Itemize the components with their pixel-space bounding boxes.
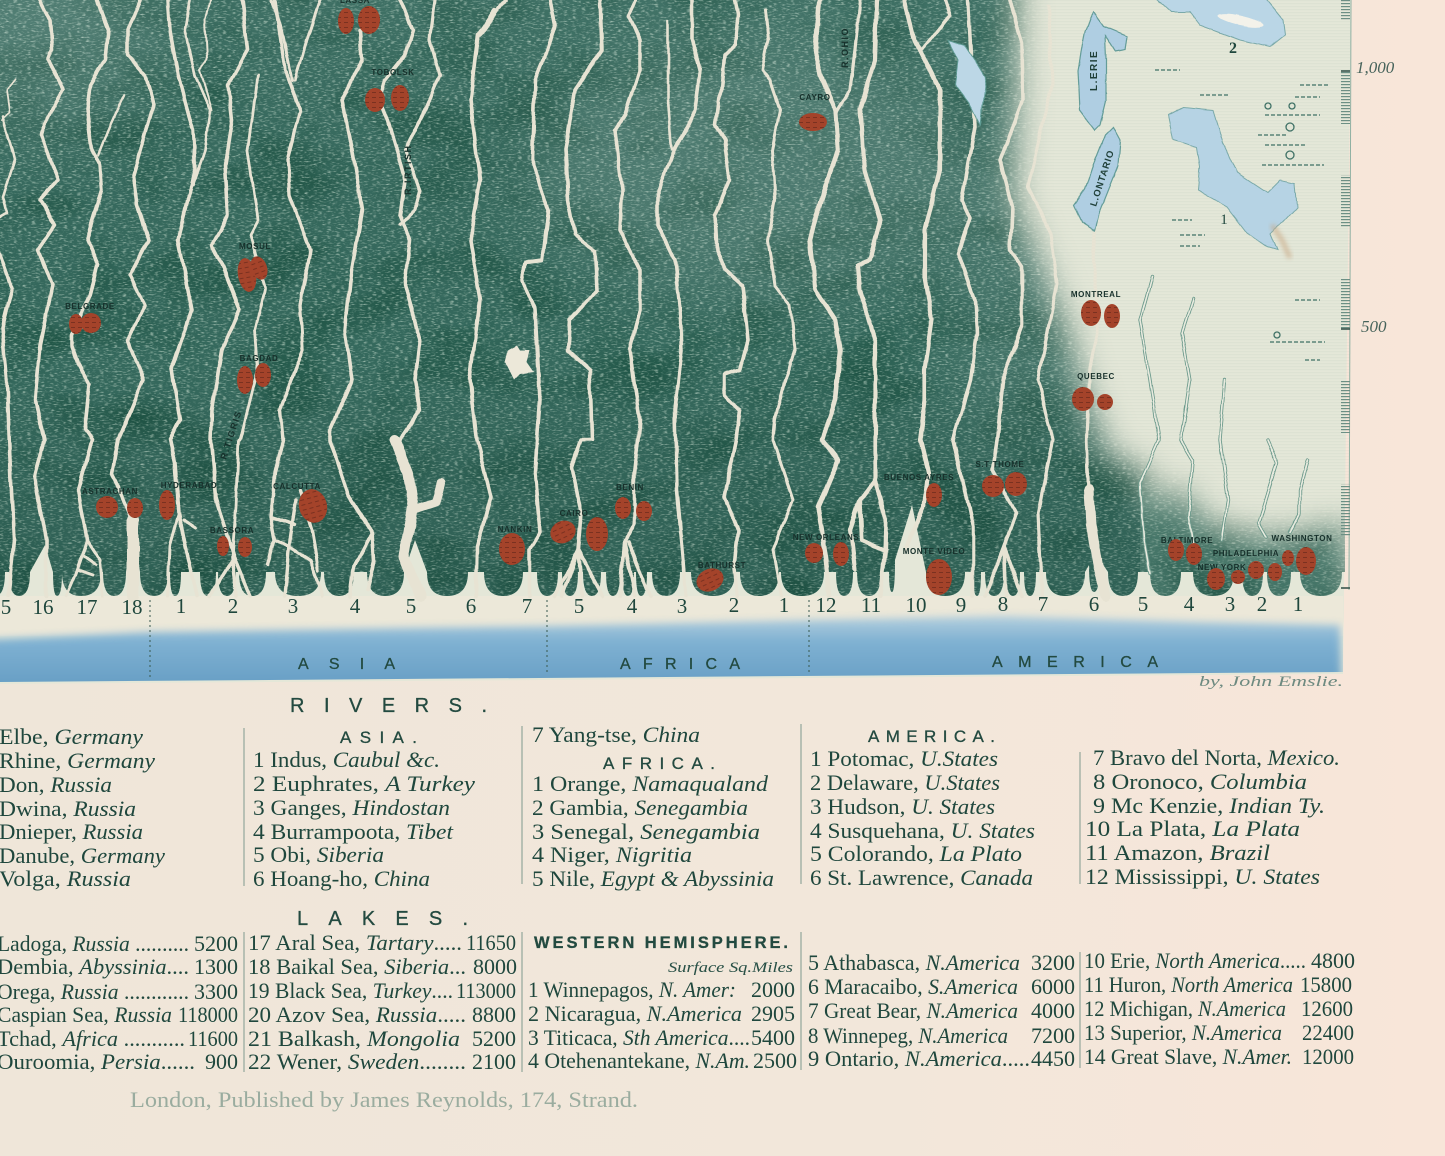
- river numbers: 2: [1257, 592, 1267, 616]
- lakes: column four: 6 Maracaibo, S.America: [808, 974, 1018, 999]
- city: Cairo: [547, 509, 608, 551]
- lakes: column one: Caspian Sea, Russia: [0, 1002, 172, 1027]
- rivers: asia column: 1 Indus, Caubul &c.: [253, 747, 440, 772]
- river numbers: 1: [779, 593, 789, 617]
- rivers: america column two: 7 Bravo del Norta, Mexico.: [1093, 745, 1340, 770]
- city: Bassora: [210, 526, 254, 557]
- rivers: [0, 0, 1106, 596]
- lakes: column three western hemisphere: 1 Winnepagos, N. Amer:: [528, 977, 736, 1002]
- lakes: column one: Ouroomia, Persia......: [0, 1049, 195, 1074]
- city: St Thome: [976, 460, 1027, 497]
- label R. Tigris: R.TIGRIS: [218, 409, 244, 461]
- label R. Irtish: R.IRTISH: [403, 144, 413, 195]
- lakes: column one: 1300: [194, 954, 238, 979]
- rivers: africa column: 1 Orange, Namaqualand: [532, 771, 769, 796]
- city: Philadelphia: PHILADELPHIA: [1213, 549, 1279, 558]
- river numbers: 3: [677, 594, 687, 618]
- rivers: america column two: 12 Mississippi, U. States: [1085, 864, 1320, 889]
- city: Buenos Ayres: BUENOS AYRES: [884, 473, 954, 482]
- river numbers: 16: [32, 595, 54, 619]
- lakes: column two: 8800: [472, 1002, 516, 1027]
- lake 1: [1168, 107, 1297, 250]
- city: Lassa: [338, 0, 380, 34]
- rivers: asia column: 3 Ganges, Hindostan: [253, 795, 450, 820]
- city: Mosul: [235, 242, 271, 293]
- scale label 1,000: 1,000: [1356, 58, 1395, 77]
- city: Philadelphia: [1213, 549, 1282, 581]
- lakes: column three western hemisphere: 5400: [751, 1025, 795, 1050]
- lakes: column three western hemisphere: [522, 932, 797, 1073]
- city: Calcutta: [273, 482, 331, 526]
- lakes: column two: 5200: [472, 1026, 516, 1051]
- lakes: column four: 6000: [1031, 974, 1075, 999]
- lakes: column two: 8000: [473, 954, 517, 979]
- rivers: asia column: [244, 728, 475, 891]
- rivers: european column: Elbe, Germany: [0, 724, 143, 749]
- city: New Orleans: [793, 533, 859, 566]
- lakes: column five: 13 Superior, N.America: [1084, 1020, 1282, 1045]
- river numbers: 5: [406, 594, 416, 618]
- rivers: america column one: 6 St. Lawrence, Canada: [810, 865, 1033, 890]
- lakes: column three western hemisphere: 2905: [751, 1001, 795, 1026]
- lakes: column one: 11600: [188, 1026, 238, 1051]
- lake on west of Great Lakes: [948, 40, 986, 125]
- lakes: column five: 12600: [1301, 996, 1353, 1021]
- rivers: africa column: 5 Nile, Egypt & Abyssinia: [532, 866, 774, 891]
- rivers: european column: Dnieper, Russia: [0, 819, 143, 844]
- lakes: column five: 4800: [1311, 948, 1355, 973]
- lighter wash on the right: [1140, 492, 1345, 596]
- city: Nankin: [498, 525, 532, 565]
- rivers: africa column: 7 Yang-tse, China: [532, 722, 700, 747]
- rivers: america column two: 10 La Plata, La Plata: [1085, 816, 1300, 841]
- lakes: column three western hemisphere: 2000: [751, 977, 795, 1002]
- river numbers: 5: [1138, 592, 1148, 616]
- lakes: column three western hemisphere: 2500: [753, 1048, 797, 1073]
- rivers: america column one: 2 Delaware, U.States: [810, 770, 1000, 795]
- lakes: column five: 12 Michigan, N.America: [1084, 996, 1286, 1021]
- lakes: column four: 7200: [1031, 1023, 1075, 1048]
- rivers: european column: Rhine, Germany: [0, 748, 155, 773]
- river numbers: 4: [350, 594, 361, 618]
- river numbers: 6: [466, 594, 476, 618]
- river numbers: 10: [906, 593, 926, 617]
- river numbers: 7: [522, 594, 532, 618]
- scale label 500: 500: [1361, 317, 1387, 336]
- city: Belgrade: BELGRADE: [65, 302, 115, 311]
- lakes: column five: 14 Great Slave, N.Amer.: [1084, 1044, 1292, 1069]
- cities: [65, 0, 1332, 596]
- city: Baltimore: BALTIMORE: [1161, 536, 1213, 545]
- lakes: [505, 0, 1297, 380]
- rivers: america column two: 9 Mc Kenzie, Indian Ty.: [1093, 793, 1325, 818]
- lakes: column four: 5 Athabasca, N.America: [808, 950, 1020, 975]
- rivers: africa column: [522, 722, 774, 891]
- river numbers: 11: [861, 593, 881, 617]
- river numbers: 5: [574, 594, 584, 618]
- city: New York: [1198, 563, 1246, 590]
- lakes: column one: Dembia, Abyssinia....: [0, 954, 189, 979]
- river numbers: 7: [1038, 592, 1048, 616]
- river numbers: 2: [729, 593, 739, 617]
- city: Cayro: [799, 93, 831, 131]
- rivers: asia column: 2 Euphrates, A Turkey: [253, 771, 475, 796]
- note: surface square miles: Surface Sq.Miles: [668, 960, 793, 976]
- sea band: [0, 610, 1343, 682]
- lakes: column two: 20 Azov Sea, Russia.....: [248, 1002, 466, 1027]
- lakes: column one: 3300: [194, 979, 238, 1004]
- land mass of river basins: [0, 0, 1350, 605]
- rivers: africa column: 2 Gambia, Senegambia: [532, 795, 748, 820]
- city: Quebec: QUEBEC: [1077, 372, 1115, 381]
- lighter patches of engraving: [0, 0, 160, 130]
- heading: western hemisphere: WESTERN HEMISPHERE.: [534, 934, 788, 952]
- rivers: european column: Don, Russia: [0, 772, 112, 797]
- continent labels: ASIA: [298, 656, 395, 673]
- lakes: column five: 15800: [1300, 972, 1352, 997]
- lake and river labels: [218, 27, 1237, 461]
- city: Nankin: NANKIN: [498, 525, 532, 534]
- continent labels: [298, 654, 1158, 673]
- lakes: column four: 7 Great Bear, N.America: [808, 998, 1018, 1023]
- city: Monte Video: [903, 547, 965, 595]
- city: Washington: WASHINGTON: [1272, 534, 1332, 543]
- river numbers: 3: [1225, 592, 1235, 616]
- lakes: column three western hemisphere: 3 Titicaca, Sth America....: [528, 1025, 750, 1050]
- map plate: [0, 0, 1395, 700]
- lakes: column two: 17 Aral Sea, Tartary.....: [248, 930, 462, 955]
- city: New Orleans: NEW ORLEANS: [793, 533, 859, 542]
- city: Montreal: MONTREAL: [1071, 290, 1121, 299]
- city: Tobolsk: [365, 68, 415, 112]
- city: Monte Video: MONTE VIDEO: [903, 547, 965, 556]
- continent labels: AFRICA: [620, 656, 740, 673]
- river numbers: 12: [816, 593, 836, 617]
- heading: Asia: ASIA.: [340, 728, 417, 747]
- river numbers: [1, 592, 1303, 619]
- city: Belgrade: [65, 302, 115, 334]
- rivers: asia column: 6 Hoang-ho, China: [253, 866, 430, 891]
- city: Montreal: [1071, 290, 1121, 328]
- city: Hyderabad: HYDERABAD: [161, 481, 217, 490]
- rivers: asia column: 5 Obi, Siberia: [253, 842, 384, 867]
- rivers: america column one: 1 Potomac, U.States: [810, 746, 998, 771]
- city: Bagdad: BAGDAD: [240, 354, 278, 363]
- rivers: america column two: 8 Oronoco, Columbia: [1093, 769, 1307, 794]
- pale ground hatching: [1030, 0, 1350, 560]
- river numbers: 2: [228, 594, 238, 618]
- lakes: column two: [244, 930, 517, 1074]
- lake number 1: 1: [1220, 212, 1228, 228]
- city: Bathurst: [693, 561, 746, 596]
- rivers: america column one: 4 Susquehana, U. States: [810, 818, 1035, 843]
- city: Cayro: CAYRO: [799, 93, 831, 102]
- lakes: column one: Tchad, Africa ...........: [0, 1026, 185, 1051]
- city: Cairo: CAIRO: [560, 509, 588, 518]
- lake number 2: 2: [1229, 40, 1237, 57]
- lakes: column two: 2100: [472, 1049, 516, 1074]
- rivers: africa column: 4 Niger, Nigritia: [532, 842, 692, 867]
- lakes: column one: 118000: [178, 1002, 238, 1027]
- rivers: asia column: 4 Burrampoota, Tibet: [253, 819, 454, 844]
- city: St Thome: S.T THOME: [976, 460, 1025, 469]
- rivers: africa column: 3 Senegal, Senegambia: [532, 819, 760, 844]
- city: Astrachan: ASTRACHAN: [82, 487, 138, 496]
- thin rivers on the pale ground: [1140, 277, 1308, 573]
- rivers: america column two: 11 Amazon, Brazil: [1085, 840, 1270, 865]
- engraver credit: by, John Emslie.: [1199, 674, 1343, 690]
- lakes: column five: [1080, 948, 1355, 1069]
- label R. Ohio: R.OHIO: [840, 27, 850, 68]
- rivers: european column: [0, 724, 165, 891]
- lakes: column four: 8 Winnepeg, N.America: [808, 1023, 1008, 1048]
- lakes: column two: 113000: [456, 978, 516, 1003]
- rivers: america column one: 3 Hudson, U. States: [810, 794, 995, 819]
- rivers: america column two: [1080, 745, 1340, 889]
- lakes: column two: 18 Baikal Sea, Siberia...: [248, 954, 466, 979]
- lakes: column four: 9 Ontario, N.America.....: [808, 1046, 1030, 1071]
- city: Washington: [1272, 534, 1332, 575]
- city: Astrachan: [82, 487, 143, 518]
- city: Benin: BENIN: [616, 483, 644, 492]
- city: Bagdad: [237, 354, 278, 394]
- continent labels: AMERICA: [992, 654, 1158, 671]
- rivers: america column one: [801, 724, 1035, 890]
- lakes: column one: 900: [205, 1049, 238, 1074]
- river numbers: 3: [288, 594, 298, 618]
- city: Baltimore: [1161, 536, 1213, 565]
- heading: rivers: RIVERS.: [290, 695, 487, 717]
- pale ground of map: [0, 0, 1351, 684]
- label L. Erie: L.ERIE: [1089, 50, 1100, 91]
- heading: Africa: AFRICA.: [603, 754, 715, 773]
- Lake Ontario: [1074, 127, 1120, 230]
- lakes: column four: 3200: [1031, 950, 1075, 975]
- city: Bassora: BASSORA: [210, 526, 254, 535]
- lakes: column two: 22 Wener, Sweden........: [248, 1049, 466, 1074]
- city: Bathurst: BATHURST: [698, 561, 746, 570]
- hatch blocks: [1341, 0, 1350, 537]
- river numbers: 5: [1, 595, 11, 619]
- river numbers: 4: [627, 594, 638, 618]
- small island: [505, 345, 534, 380]
- lakes: column two: 19 Black Sea, Turkey....: [248, 978, 453, 1003]
- lakes: column two: 11650: [466, 930, 516, 955]
- city: Benin: [615, 483, 652, 521]
- heading: lakes: LAKES.: [297, 908, 468, 930]
- label L. Ontario: L.ONTARIO: [1088, 149, 1117, 208]
- lakes: column five: 22400: [1302, 1020, 1354, 1045]
- rivers: european column: Volga, Russia: [0, 866, 131, 891]
- lake 2: [1155, 0, 1285, 47]
- heading: America: AMERICA.: [868, 727, 995, 746]
- islets and trees: [1155, 70, 1328, 360]
- river numbers: 9: [956, 593, 966, 617]
- city: New York: NEW YORK: [1198, 563, 1246, 572]
- lakes: column two: 21 Balkash, Mongolia: [248, 1026, 460, 1051]
- lakes: column five: 12000: [1302, 1044, 1354, 1069]
- river numbers: 1: [1293, 592, 1303, 616]
- city: Buenos Ayres: [884, 473, 954, 507]
- Lake Erie: [1078, 12, 1127, 130]
- river numbers: 18: [122, 595, 142, 619]
- continent dividers: [150, 600, 809, 678]
- lakes: column one: Orega, Russia ............: [0, 979, 189, 1004]
- river numbers: 6: [1089, 592, 1099, 616]
- city: Quebec: [1072, 372, 1115, 411]
- rivers: european column: Danube, Germany: [0, 843, 165, 868]
- river numbers: 8: [998, 592, 1008, 616]
- lakes: column one: [0, 931, 238, 1074]
- lakes: column three western hemisphere: 4 Otehenantekane, N.Am.: [528, 1048, 750, 1073]
- lakes: column four: [801, 932, 1075, 1071]
- lakes: column three western hemisphere: 2 Nicaragua, N.America: [528, 1001, 742, 1026]
- city: Mosul: MOSUL: [239, 242, 271, 251]
- publisher line: London, Published by James Reynolds, 174, Strand.: [130, 1087, 638, 1112]
- river numbers: 1: [176, 594, 186, 618]
- lakes: column five: 11 Huron, North America: [1084, 972, 1293, 997]
- lakes: column four: 4000: [1031, 998, 1075, 1023]
- height scale: [1341, 0, 1395, 590]
- stain below lake 1: [1272, 225, 1290, 258]
- city: Calcutta: CALCUTTA: [273, 482, 321, 491]
- rivers: european column: Dwina, Russia: [0, 796, 136, 821]
- lakes: column five: 10 Erie, North America.....: [1084, 948, 1306, 973]
- lakes: column one: Ladoga, Russia ..........: [0, 931, 189, 956]
- city: Hyderabad: [159, 481, 217, 520]
- river numbers: 4: [1184, 592, 1195, 616]
- highlight in lake 2: [1216, 10, 1264, 30]
- river numbers: 17: [76, 595, 98, 619]
- lakes: column one: 5200: [194, 931, 238, 956]
- lakes: column four: 4450: [1031, 1046, 1075, 1071]
- city: Tobolsk: TOBOLSK: [371, 68, 415, 77]
- rivers: america column one: 5 Colorando, La Plato: [810, 841, 1022, 866]
